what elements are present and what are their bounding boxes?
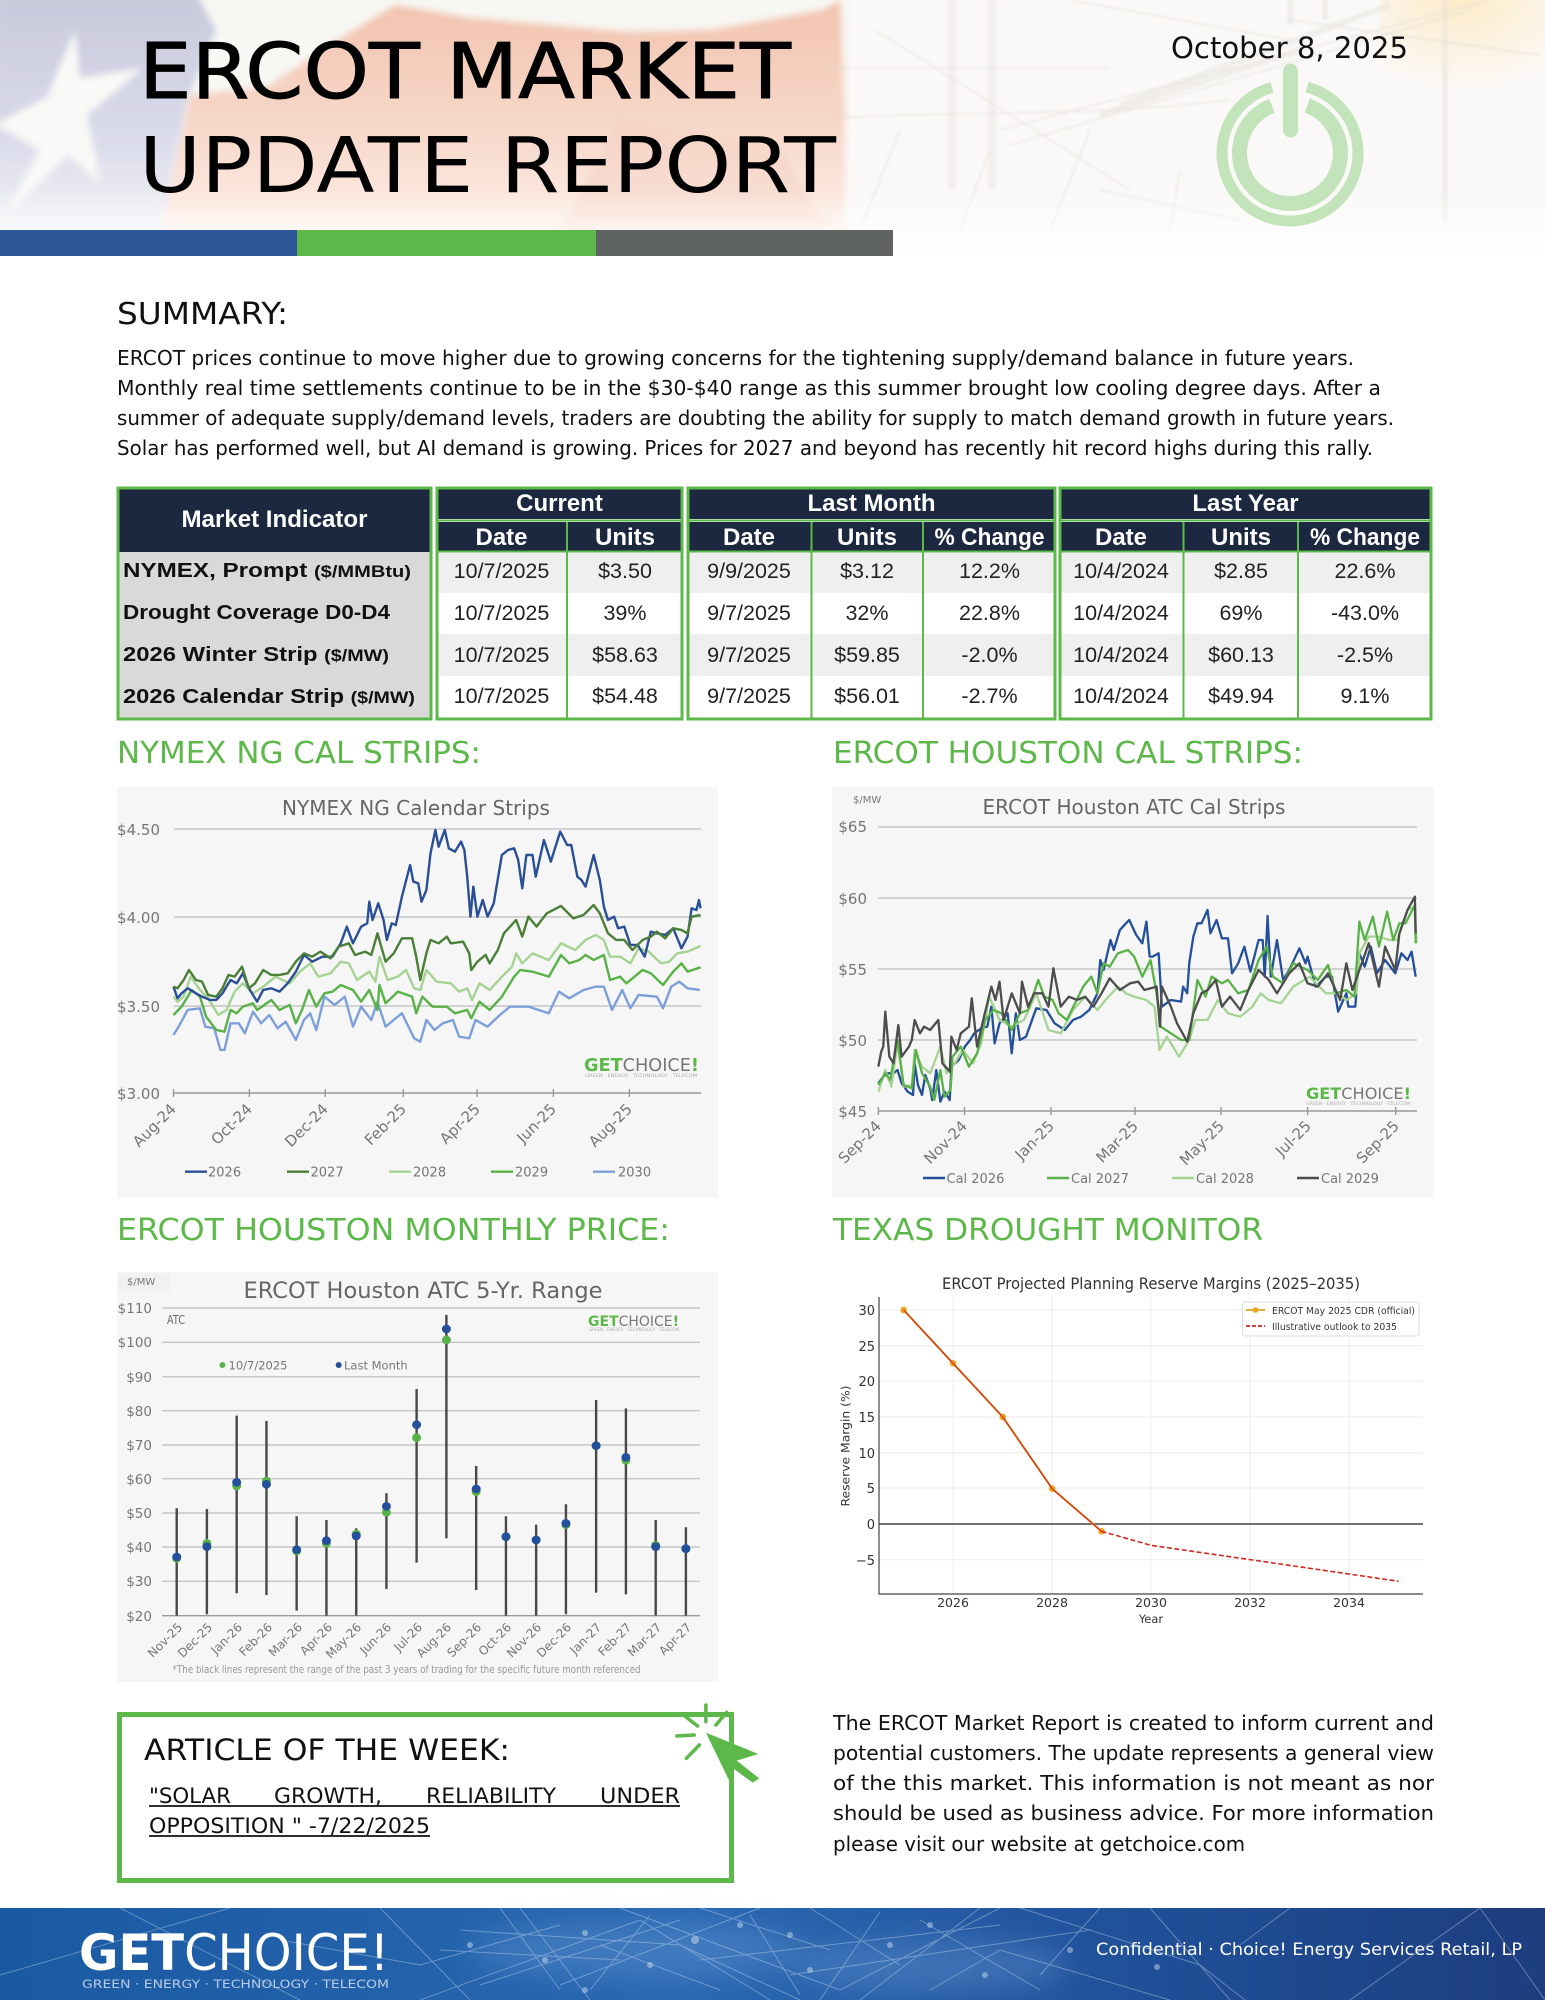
table: last year group: % Change (1310, 524, 1420, 551)
table: last year group: 9.1% (1340, 684, 1390, 708)
table: last month group: Units (837, 524, 897, 551)
y axis labels: 30 (858, 1304, 875, 1319)
table: last year group: 10/4/2024 (1073, 559, 1169, 583)
x axis labels: Jun-25 (512, 1100, 560, 1147)
footnote: *The black lines represent the range of the past 3 years of trading for the specific future month referenced (173, 1664, 641, 1676)
chart: ERCOT Houston ATC cal strips: $50 (838, 1032, 867, 1050)
table: last month group: $56.01 (834, 684, 900, 708)
x axis labels: Nov-26 (504, 1620, 544, 1660)
date: October 8, 2025 (1171, 31, 1408, 65)
table: last month group: -2.0% (961, 643, 1018, 667)
y axis labels: $20 (126, 1609, 152, 1625)
y axis labels: $60 (126, 1472, 152, 1488)
y axis labels: $110 (118, 1301, 152, 1317)
footer band (0, 1908, 1545, 2000)
table: current group: $54.48 (592, 684, 658, 708)
chart: ERCOT Houston ATC 5-year range: ATC (167, 1313, 185, 1327)
x axis labels: Oct-24 (207, 1100, 256, 1148)
x axis labels: Aug-26 (414, 1620, 454, 1661)
article link: UNDER (600, 1784, 680, 1808)
legend: 2029 (515, 1166, 548, 1180)
article link: OPPOSITION " -7/22/2025 (149, 1814, 430, 1838)
table: last year group: 10/4/2024 (1073, 601, 1169, 625)
x axis labels: Jan-27 (567, 1620, 604, 1658)
chart: ERCOT Houston ATC cal strips: $55 (838, 961, 867, 979)
chart: ERCOT Houston ATC 5-year range: ERCOT Houston ATC 5-Yr. Range (244, 1279, 602, 1304)
x axis labels: Apr-27 (656, 1620, 694, 1658)
y axis labels: 0 (867, 1518, 875, 1533)
x axis labels: 2032 (1234, 1595, 1266, 1610)
x axis labels: Jun-26 (356, 1620, 394, 1658)
chart: projected planning reserve margins: ERCOT Projected Planning Reserve Margins (2025–2035) (942, 1274, 1360, 1293)
y axis labels: −5 (856, 1554, 875, 1569)
summary text: Monthly real time settlements continue to be in the $30-$40 range as this summer brought low cooling degree days. After a (117, 376, 1381, 400)
x axis labels: Mar-26 (266, 1620, 305, 1659)
table: last year group: $60.13 (1208, 643, 1274, 667)
x axis labels: Sep-24 (835, 1117, 885, 1167)
x axis labels: Sep-25 (1353, 1117, 1403, 1167)
table: current group (437, 488, 682, 719)
legend: Cal 2029 (1321, 1172, 1379, 1187)
chart: NYMEX NG calendar strips: $3.50 (117, 998, 160, 1016)
table: last month group: % Change (934, 524, 1044, 551)
summary text (117, 346, 1394, 460)
legend: Last Month (344, 1358, 408, 1372)
table: last year group: 10/4/2024 (1073, 684, 1169, 708)
table: last year group: -43.0% (1331, 601, 1399, 625)
chart: NYMEX NG calendar strips: NYMEX NG Calendar Strips (282, 796, 550, 820)
footer logo: GREEN · ENERGY · TECHNOLOGY · TELECOM (82, 1977, 389, 1991)
x axis labels: Nov-25 (145, 1620, 185, 1660)
table: last month group: Date (723, 524, 775, 551)
table: current group: Current (516, 490, 603, 517)
y axis labels: $90 (126, 1370, 152, 1386)
summary text: Solar has performed well, but AI demand is growing. Prices for 2027 and beyond has recently hit record highs during this rally. (117, 436, 1373, 460)
legend (219, 1358, 408, 1372)
table: indicator column (118, 488, 431, 719)
y axis labels: 20 (858, 1375, 875, 1390)
x axis labels: Apr-25 (436, 1100, 484, 1148)
table: last year group (1060, 488, 1431, 719)
legend (185, 1166, 651, 1180)
table: last year group: $49.94 (1208, 684, 1274, 708)
table: current group: 39% (603, 601, 647, 625)
table: last month group: 9/7/2025 (707, 684, 791, 708)
disclaimer text: The ERCOT Market Report is created to inform current and (832, 1711, 1434, 1735)
table: last month group: 22.8% (959, 601, 1020, 625)
chart: ERCOT Houston ATC cal strips: $/MW (853, 795, 881, 806)
legend: 2026 (208, 1166, 241, 1180)
table: indicator column: 2026 Calendar Strip ($/MW) (123, 685, 415, 708)
chart: NYMEX NG calendar strips: $3.00 (117, 1085, 160, 1103)
icon: click cursor (677, 1705, 759, 1783)
table: current group: 10/7/2025 (454, 643, 549, 667)
table: last month group: 9/7/2025 (707, 643, 791, 667)
legend: Cal 2027 (1071, 1172, 1129, 1187)
range lines and price dots (172, 1315, 690, 1616)
table: last year group: Units (1211, 524, 1271, 551)
legend: 2030 (618, 1166, 651, 1180)
y axis labels: $80 (126, 1404, 152, 1420)
table: indicator column: NYMEX, Prompt ($/MMBtu) (123, 559, 411, 582)
x axis labels: Feb-26 (236, 1620, 275, 1659)
table: indicator column: Drought Coverage D0-D4 (123, 601, 391, 624)
y axis labels: 15 (858, 1411, 875, 1426)
x axis labels (129, 1100, 636, 1151)
y axis labels: $100 (118, 1335, 152, 1351)
x axis labels: Jan-26 (208, 1620, 245, 1658)
x axis labels: 2030 (1135, 1595, 1167, 1610)
x axis labels: Dec-25 (175, 1620, 215, 1660)
article link: RELIABILITY (426, 1784, 556, 1808)
legend: 10/7/2025 (228, 1358, 287, 1372)
legend: Cal 2026 (946, 1172, 1004, 1187)
disclaimer text (832, 1711, 1435, 1856)
x axis labels: Jul-26 (390, 1620, 425, 1655)
title: UPDATE REPORT (139, 122, 837, 211)
table: last year group: 10/4/2024 (1073, 643, 1169, 667)
table: indicator column: 2026 Winter Strip ($/MW) (123, 643, 389, 666)
x axis labels (835, 1117, 1403, 1169)
logo: GREEN · ENERGY · TECHNOLOGY · TELECOM (1306, 1101, 1410, 1107)
disclaimer text: should be used as business advice. For more information (833, 1801, 1434, 1825)
article heading: ARTICLE OF THE WEEK: (144, 1733, 510, 1767)
y axis labels: $70 (126, 1438, 152, 1454)
chart: ERCOT Houston ATC cal strips: $45 (838, 1103, 867, 1121)
table: last month group: $59.85 (834, 643, 900, 667)
icon: power symbol (1207, 70, 1373, 236)
chart: ERCOT Houston ATC 5-year range (117, 1272, 718, 1682)
x axis labels: Mar-27 (625, 1620, 664, 1659)
chart: ERCOT Houston ATC cal strips (832, 787, 1434, 1198)
logo: GETCHOICE! (584, 1056, 699, 1076)
logo: GETCHOICE! (1306, 1084, 1411, 1103)
x axis labels: 2026 (937, 1595, 969, 1610)
table: last month group (688, 488, 1055, 719)
heading: drought monitor: TEXAS DROUGHT MONITOR (832, 1213, 1263, 1248)
chart: projected planning reserve margins: Reserve Margin (%) (838, 1386, 852, 1506)
x axis labels: Feb-27 (595, 1620, 634, 1659)
disclaimer text: of the this market. This information is not meant as nor (833, 1771, 1435, 1795)
x axis labels: Apr-26 (297, 1620, 335, 1658)
chart: NYMEX NG calendar strips (117, 787, 718, 1198)
article link (149, 1784, 680, 1838)
table: last year group: 22.6% (1335, 559, 1395, 583)
header banner (0, 0, 1545, 260)
table: last year group: Date (1095, 524, 1147, 551)
x axis labels: Year (1138, 1612, 1163, 1626)
table: current group: 10/7/2025 (454, 559, 549, 583)
x axis labels: Feb-25 (361, 1100, 410, 1149)
logo: GREEN · ENERGY · TECHNOLOGY · TELECOM (589, 1327, 680, 1332)
x axis labels: Nov-24 (920, 1117, 971, 1168)
table: last month group: $3.12 (840, 559, 894, 583)
chart: NYMEX NG calendar strips: $4.00 (117, 909, 160, 927)
x axis labels (145, 1620, 694, 1661)
legend: 2028 (413, 1166, 446, 1180)
official series (900, 1307, 1399, 1581)
table: last year group: $2.85 (1214, 559, 1268, 583)
table: last year group: 69% (1219, 601, 1263, 625)
table: last month group: 9/7/2025 (707, 601, 791, 625)
x axis labels: Sep-26 (444, 1620, 484, 1660)
summary text: ERCOT prices continue to move higher due to growing concerns for the tightening supply/demand balance in future years. (117, 346, 1354, 370)
table: indicator column: Market Indicator (182, 506, 368, 533)
summary text: summer of adequate supply/demand levels, traders are doubting the ability for supply to match demand growth in future years. (117, 406, 1394, 430)
x axis labels: Mar-25 (1092, 1117, 1142, 1166)
y axis labels: $40 (126, 1540, 152, 1556)
data lines (173, 830, 701, 1050)
x axis labels (937, 1595, 1365, 1626)
legend: ERCOT May 2025 CDR (official) (1272, 1306, 1415, 1317)
x axis labels: Aug-24 (129, 1100, 180, 1151)
x axis labels: Oct-26 (476, 1620, 514, 1659)
chart: ERCOT Houston ATC 5-year range: $/MW (127, 1277, 155, 1288)
article link: GROWTH, (274, 1784, 382, 1808)
logo: GETCHOICE! (588, 1314, 679, 1330)
x axis labels: Jul-25 (1271, 1117, 1315, 1161)
title (139, 28, 837, 211)
table: last year group: Last Year (1192, 490, 1299, 517)
disclaimer text: please visit our website at getchoice.com (833, 1832, 1245, 1856)
chart: projected planning reserve margins (838, 1274, 1423, 1626)
x axis labels: 2028 (1036, 1595, 1068, 1610)
y axis labels: $50 (126, 1506, 152, 1522)
panel: article of the week (120, 1705, 759, 1880)
legend: 2027 (310, 1166, 344, 1180)
table: current group: 10/7/2025 (454, 601, 549, 625)
x axis labels: Jan-25 (1011, 1117, 1058, 1164)
chart: ERCOT Houston ATC cal strips: $65 (838, 818, 867, 836)
heading: nymex: NYMEX NG CAL STRIPS: (117, 736, 481, 771)
logo: GREEN · ENERGY · TECHNOLOGY · TELECOM (585, 1073, 697, 1079)
table: last month group: Last Month (808, 490, 935, 517)
table: current group: Date (475, 524, 528, 551)
x axis labels: Aug-25 (585, 1100, 636, 1151)
x axis labels: Dec-24 (281, 1100, 332, 1151)
y axis labels (856, 1304, 875, 1569)
y axis labels: 25 (858, 1340, 875, 1355)
legend: Illustrative outlook to 2035 (1272, 1322, 1397, 1333)
disclaimer text: potential customers. The update represents a general view (833, 1741, 1434, 1765)
y axis labels (118, 1301, 152, 1625)
colour bars (0, 230, 893, 256)
table: current group: $3.50 (598, 559, 652, 583)
article link: "SOLAR (149, 1784, 231, 1808)
x axis labels: Dec-26 (534, 1620, 574, 1660)
table: current group: $58.63 (592, 643, 658, 667)
table: last month group: 9/9/2025 (707, 559, 791, 583)
chart: NYMEX NG calendar strips: $4.50 (117, 821, 160, 839)
legend (923, 1172, 1379, 1187)
table: last month group: -2.7% (961, 684, 1018, 708)
table: last month group: 12.2% (959, 559, 1020, 583)
x axis labels: May-26 (323, 1620, 364, 1661)
table: last year group: -2.5% (1337, 643, 1393, 667)
table: last month group: 32% (845, 601, 889, 625)
chart: ERCOT Houston ATC cal strips: ERCOT Houston ATC Cal Strips (982, 795, 1286, 819)
heading: ercot houston cal: ERCOT HOUSTON CAL STRIPS: (833, 736, 1303, 771)
y axis labels: $30 (126, 1574, 152, 1590)
footer logo: GETCHOICE! (79, 1924, 389, 1982)
x axis labels: May-25 (1176, 1117, 1228, 1169)
market indicator table (118, 488, 1431, 719)
summary heading: SUMMARY: (117, 297, 288, 332)
legend: Cal 2028 (1196, 1172, 1254, 1187)
x axis labels: 2034 (1333, 1595, 1365, 1610)
title: ERCOT MARKET (139, 28, 792, 117)
heading: monthly price: ERCOT HOUSTON MONTHLY PRICE: (117, 1213, 670, 1248)
y axis labels: 5 (867, 1482, 875, 1497)
data lines (878, 897, 1416, 1102)
footer confidentiality note: Confidential · Choice! Energy Services Retail, LP (1096, 1940, 1522, 1960)
table: current group: Units (595, 524, 655, 551)
legend (1242, 1302, 1419, 1336)
chart: ERCOT Houston ATC cal strips: $60 (838, 890, 867, 908)
y axis labels: 10 (858, 1447, 875, 1462)
table: current group: 10/7/2025 (454, 684, 549, 708)
